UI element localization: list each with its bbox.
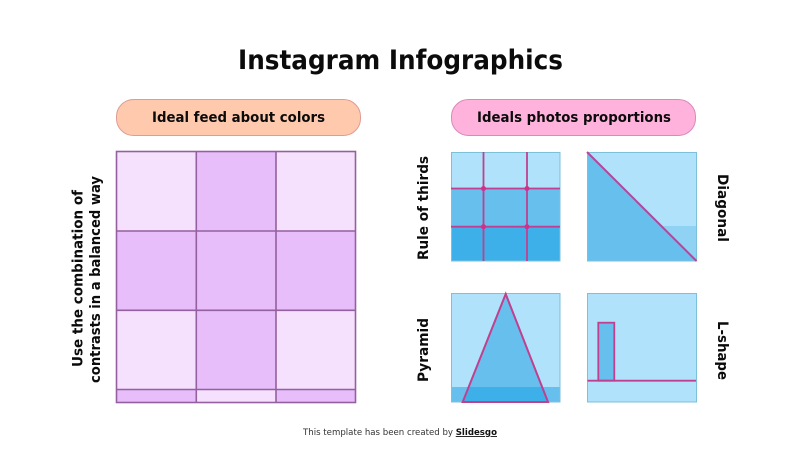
heading pill: ideal feed about colors bbox=[116, 100, 360, 136]
title: Instagram Infographics bbox=[238, 45, 563, 76]
photo: pyramid bbox=[451, 293, 560, 402]
photo: rule of thirds bbox=[451, 152, 560, 261]
vertical caption: color contrast advice: Use the combination of bbox=[70, 189, 86, 367]
label: diagonal: Diagonal bbox=[714, 174, 730, 242]
vertical caption: color contrast advice bbox=[70, 176, 104, 383]
photo: L-shape bbox=[587, 293, 696, 402]
heading pill: ideal photos proportions bbox=[452, 100, 696, 136]
vertical caption: color contrast advice: contrasts in a balanced way bbox=[88, 176, 104, 383]
label: rule of thirds: Rule of thirds bbox=[416, 156, 432, 260]
grid lines bbox=[116, 152, 356, 402]
heading pill: ideal photos proportions: Ideals photos proportions bbox=[477, 110, 671, 126]
label: pyramid: Pyramid bbox=[416, 318, 432, 382]
photo: diagonal bbox=[587, 152, 696, 261]
heading pill: ideal feed about colors: Ideal feed about colors bbox=[152, 110, 325, 126]
label: L-shape: L-shape bbox=[714, 321, 730, 380]
light feed cells bbox=[116, 152, 356, 402]
footer credit: This template has been created by Slidesgo bbox=[302, 428, 497, 438]
color feed grid bbox=[116, 152, 356, 402]
